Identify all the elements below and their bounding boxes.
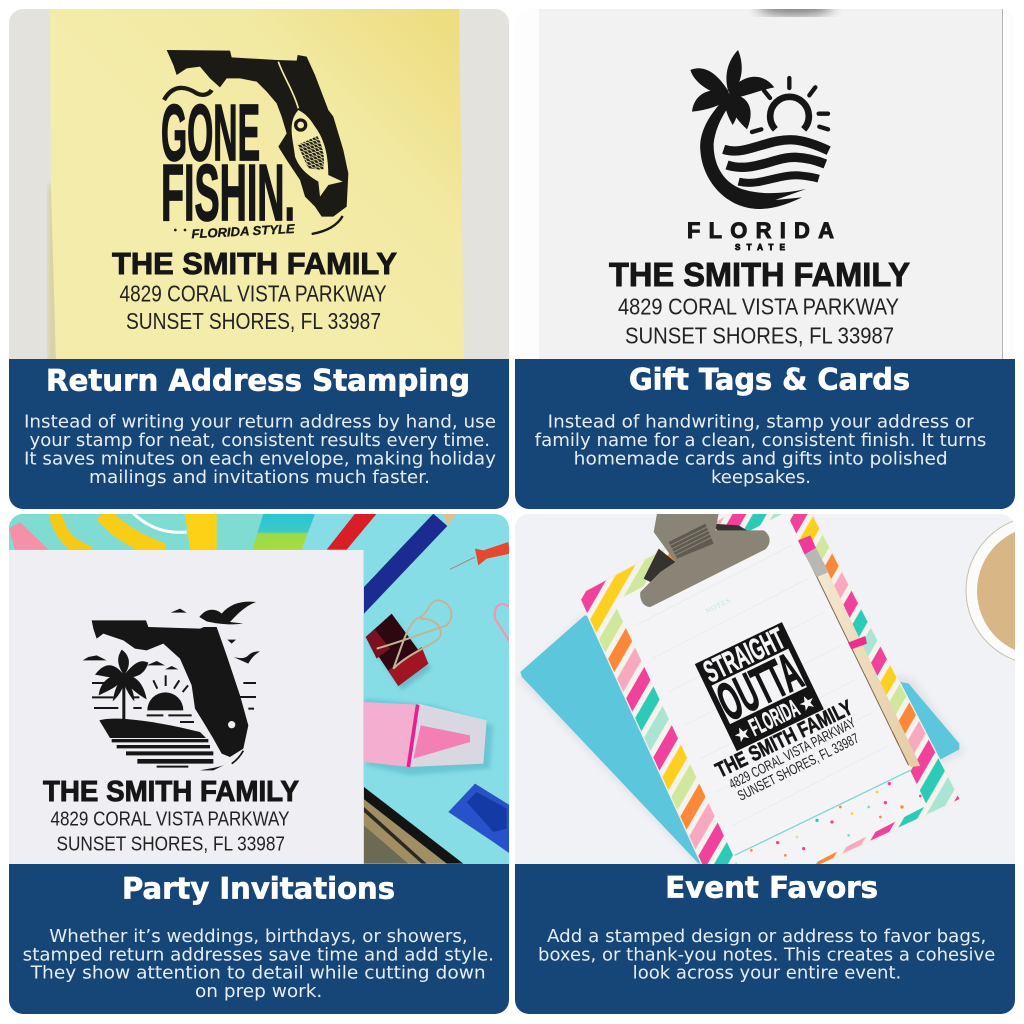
clipboard photo <box>520 514 1015 864</box>
panel: Party Invitations <box>9 512 510 1014</box>
address text: SUNSET SHORES, FL 33987 <box>625 322 894 348</box>
caption band: Gift Tags & Cards <box>629 362 910 396</box>
address text: STATE <box>735 243 786 252</box>
pencil <box>798 535 920 767</box>
address text: THE SMITH FAMILY <box>609 256 910 293</box>
caption band: Event Favors <box>665 871 878 905</box>
caption band <box>9 359 509 509</box>
address text: 4829 CORAL VISTA PARKWAY <box>618 294 899 320</box>
caption band <box>515 864 1015 1014</box>
coffee cup <box>966 520 1015 661</box>
caption band: homemade cards and gifts into polished <box>574 450 948 470</box>
stamp art: Gone Fishin Florida: FISHIN. <box>161 148 295 237</box>
caption band: Instead of handwriting, stamp your address or <box>548 412 974 432</box>
caption band: look across your entire event. <box>633 964 901 984</box>
caption band: Add a stamped design or address to favor bags, <box>547 927 986 947</box>
yellow sticky note <box>50 9 464 359</box>
caption band: mailings and invitations much faster. <box>89 468 430 488</box>
address text <box>609 218 910 348</box>
caption band <box>515 359 1015 509</box>
caption band: They show attention to detail while cutting down <box>30 964 486 984</box>
address text: SUNSET SHORES, FL 33987 <box>735 731 862 805</box>
desk supplies photo <box>9 512 510 864</box>
panel: Event Favors <box>515 479 1024 1014</box>
caption band: Return Address Stamping <box>46 364 470 398</box>
stamp art: Straight Outta Florida: FLORIDA <box>745 695 804 742</box>
stamp art: Florida with palm, sun, birds <box>83 602 260 770</box>
white card <box>539 9 1002 359</box>
address text: SUNSET SHORES, FL 33987 <box>56 832 285 856</box>
panel: Return Address Stamping <box>9 9 509 509</box>
address text: THE SMITH FAMILY <box>712 695 856 782</box>
address text: 4829 CORAL VISTA PARKWAY <box>727 715 859 793</box>
stamp art: Gone Fishin Florida: FLORIDA STYLE <box>191 222 296 241</box>
caption band: boxes, or thank-you notes. This creates a cohesive <box>538 945 995 965</box>
address text: THE SMITH FAMILY <box>112 246 397 281</box>
caption band: Whether it’s weddings, birthdays, or showers, <box>49 927 468 947</box>
stamp art: Straight Outta Florida <box>693 619 824 751</box>
address text <box>713 699 858 800</box>
caption band: stamped return addresses save time and add style. <box>23 945 494 965</box>
caption band <box>9 864 509 1014</box>
address text: FLORIDA <box>687 218 834 243</box>
address text <box>43 776 299 856</box>
caption band: your stamp for neat, consistent results every time. <box>30 431 490 451</box>
address text <box>112 246 397 334</box>
clipboard photo: NOTES <box>704 596 732 615</box>
address text: THE SMITH FAMILY <box>43 776 299 808</box>
stamp art: Gone Fishin Florida: GONE <box>161 88 260 177</box>
caption band: It saves minutes on each envelope, making holiday <box>24 450 496 470</box>
caption band: Party Invitations <box>122 872 395 906</box>
address text: 4829 CORAL VISTA PARKWAY <box>50 808 290 830</box>
address text: SUNSET SHORES, FL 33987 <box>126 308 381 334</box>
caption band: keepsakes. <box>711 468 811 488</box>
caption band: family name for a clean, consistent finish. It turns <box>535 431 986 451</box>
caption band: Instead of writing your return address by hand, use <box>24 412 496 432</box>
stamp art: Straight Outta Florida: OUTTA <box>708 642 811 733</box>
caption band: on prep work. <box>195 982 322 1002</box>
stamp art: Straight Outta Florida: STRAIGHT <box>698 622 790 689</box>
address text: 4829 CORAL VISTA PARKWAY <box>120 280 386 306</box>
metal clip <box>640 514 770 607</box>
stamp art: palm and sun logo <box>690 50 829 209</box>
panel: Gift Tags & Cards <box>515 0 1015 509</box>
white card <box>9 550 364 864</box>
stamp art: Gone Fishin Florida <box>161 50 348 241</box>
